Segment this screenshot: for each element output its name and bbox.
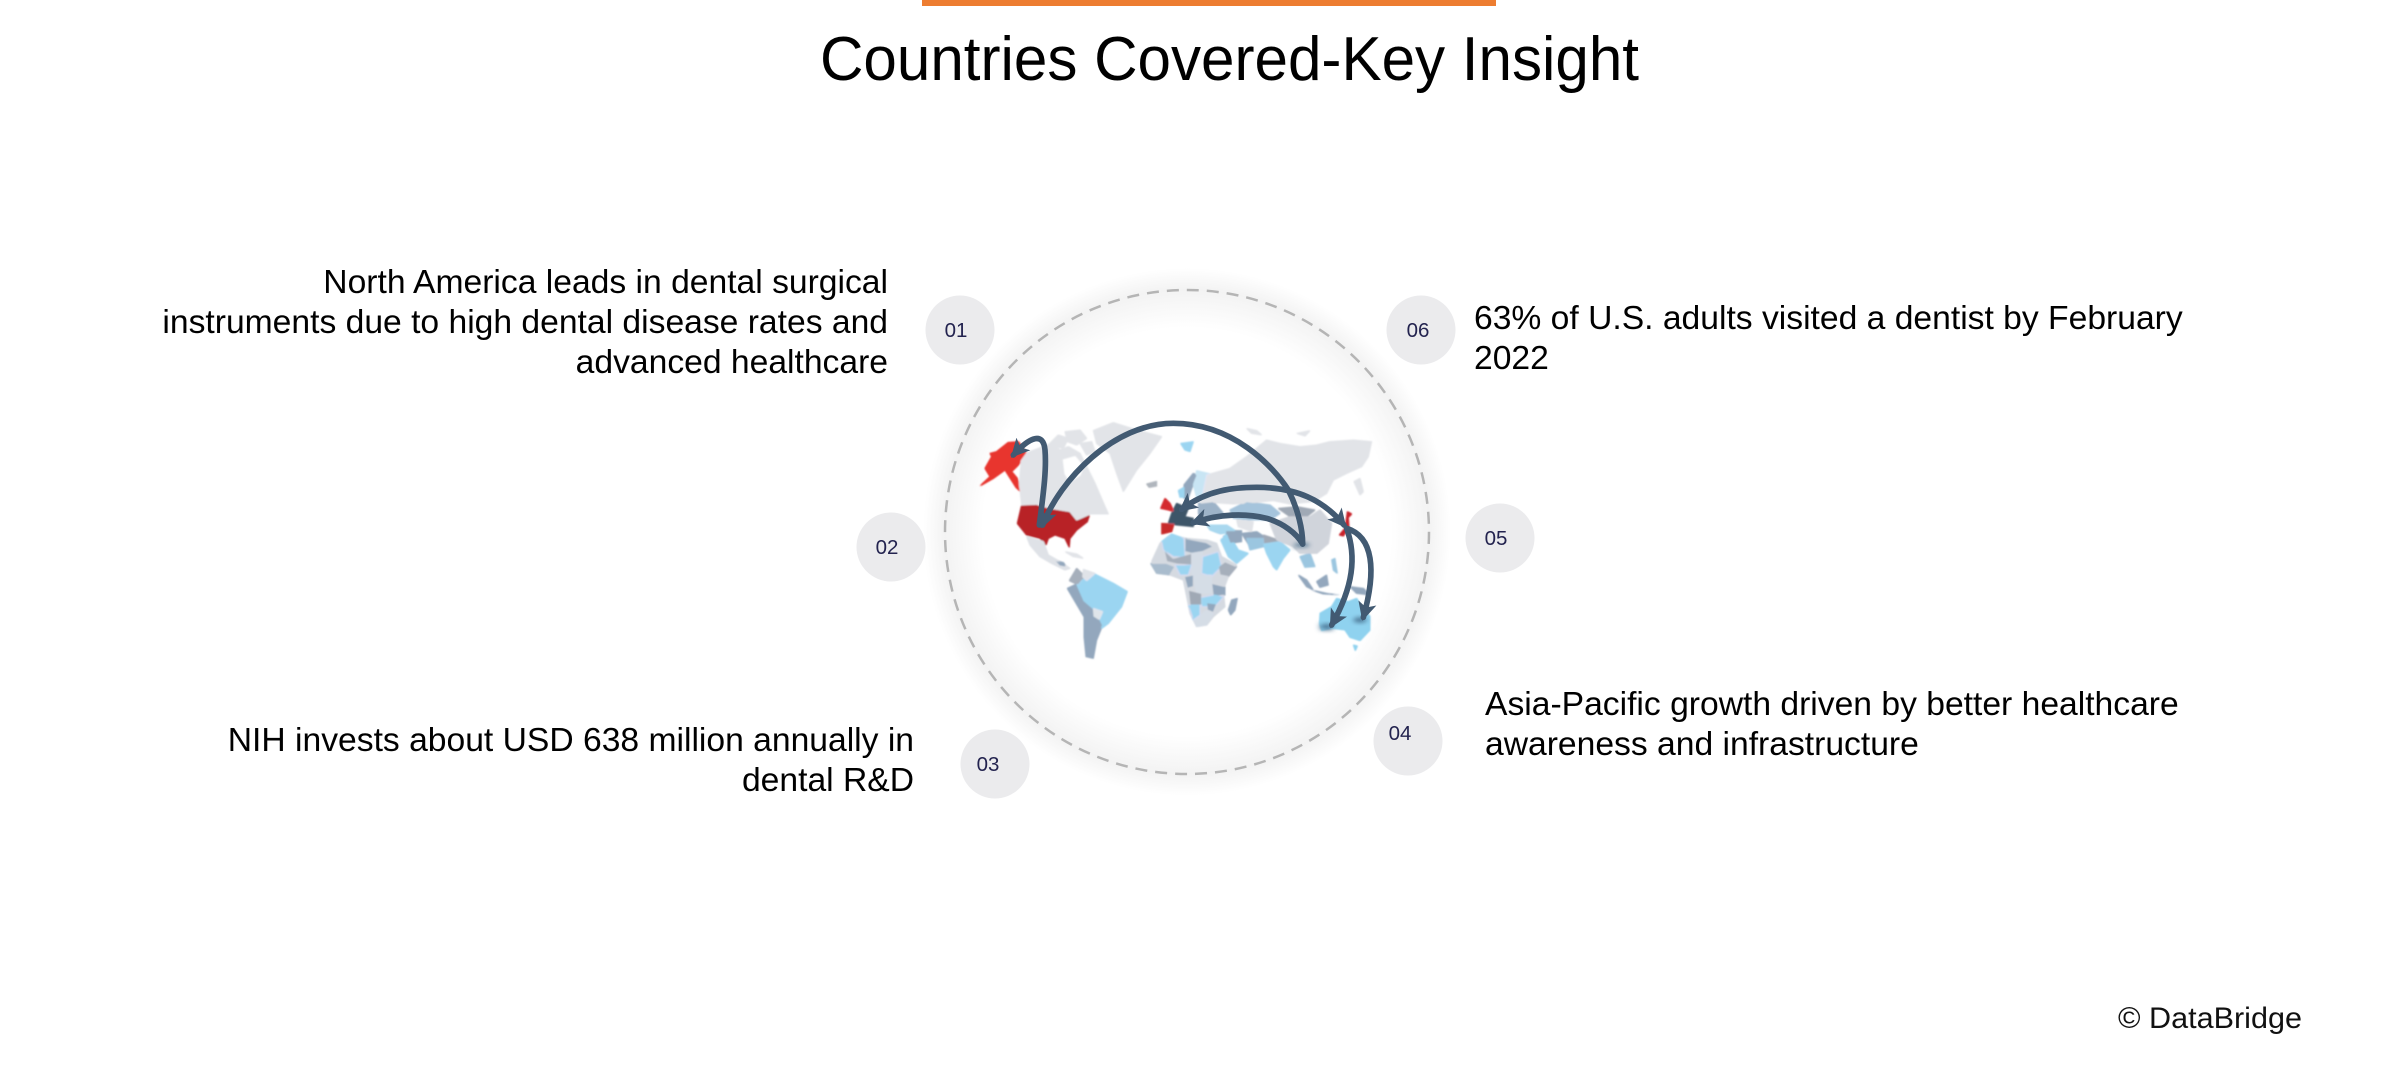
badge 03 (960, 730, 1030, 798)
badge 04: 04 (1389, 722, 1411, 745)
insight 01 text (162, 264, 888, 381)
Japan (1339, 512, 1352, 536)
insight 04 text (1485, 686, 2179, 763)
insight 03 text: dental R&D (742, 762, 914, 799)
Spain (1162, 523, 1174, 534)
insight 06 text: 2022 (1474, 340, 1549, 377)
badge 05: 05 (1485, 527, 1507, 550)
North America land (1019, 443, 1108, 520)
orange top bar (922, 0, 1496, 6)
copyright: © DataBridge (2118, 1002, 2302, 1035)
insight 06 text (1474, 300, 2183, 377)
France (1168, 503, 1193, 527)
Scandinavia and Svalbard (1181, 442, 1193, 452)
insight 01 text: instruments due to high dental disease rates and (162, 304, 888, 341)
insight 03 text: NIH invests about USD 638 million annually in (228, 722, 914, 759)
Australia (1319, 598, 1370, 641)
South East Asia (1300, 553, 1315, 567)
arc: Europe to Japan (1182, 487, 1344, 525)
badge 06 (1386, 296, 1456, 364)
insight 01 text: North America leads in dental surgical (323, 264, 888, 301)
title: Countries Covered-Key Insight (820, 25, 1639, 94)
Madagascar (1228, 598, 1237, 615)
China and East Asia (1270, 510, 1332, 553)
insight 06 text: 63% of U.S. adults visited a dentist by February (1474, 300, 2183, 337)
badge 01 (926, 296, 994, 364)
badge 02 (856, 512, 926, 582)
insight 04 text: Asia-Pacific growth driven by better healthcare (1485, 686, 2179, 723)
arc: USA to China (1043, 423, 1303, 544)
United Kingdom (1161, 498, 1174, 512)
central globe ring with glow (915, 260, 1459, 804)
Africa (1152, 535, 1237, 627)
badge 05 (1466, 504, 1534, 572)
arcs (1013, 423, 1371, 625)
Middle East and Central Asia (1220, 533, 1248, 563)
badge 01: 01 (945, 319, 967, 342)
badge 04 (1374, 706, 1442, 776)
arc: USA to Alaska (1013, 438, 1045, 525)
arc: China to Italy (1193, 515, 1303, 544)
world map with arcs (980, 423, 1372, 658)
Alaska (980, 442, 1027, 492)
badge 03: 03 (977, 753, 999, 776)
land masses (980, 423, 1372, 658)
contiguous USA (1017, 504, 1089, 547)
Europe (1198, 502, 1223, 517)
Iceland (1147, 481, 1157, 487)
Mexico and Central America (1027, 537, 1070, 570)
badge 02: 02 (876, 536, 898, 559)
South America (1077, 573, 1127, 628)
badge 06: 06 (1407, 319, 1429, 342)
insight 04 text: awareness and infrastructure (1485, 726, 1919, 763)
insight 03 text (228, 722, 914, 799)
Greenland (1093, 423, 1162, 492)
Russia (1200, 440, 1372, 507)
arc: Japan to eastern Australia (1347, 528, 1371, 617)
insight 01 text: advanced healthcare (576, 344, 888, 381)
arc: Japan to western Australia (1332, 528, 1352, 625)
